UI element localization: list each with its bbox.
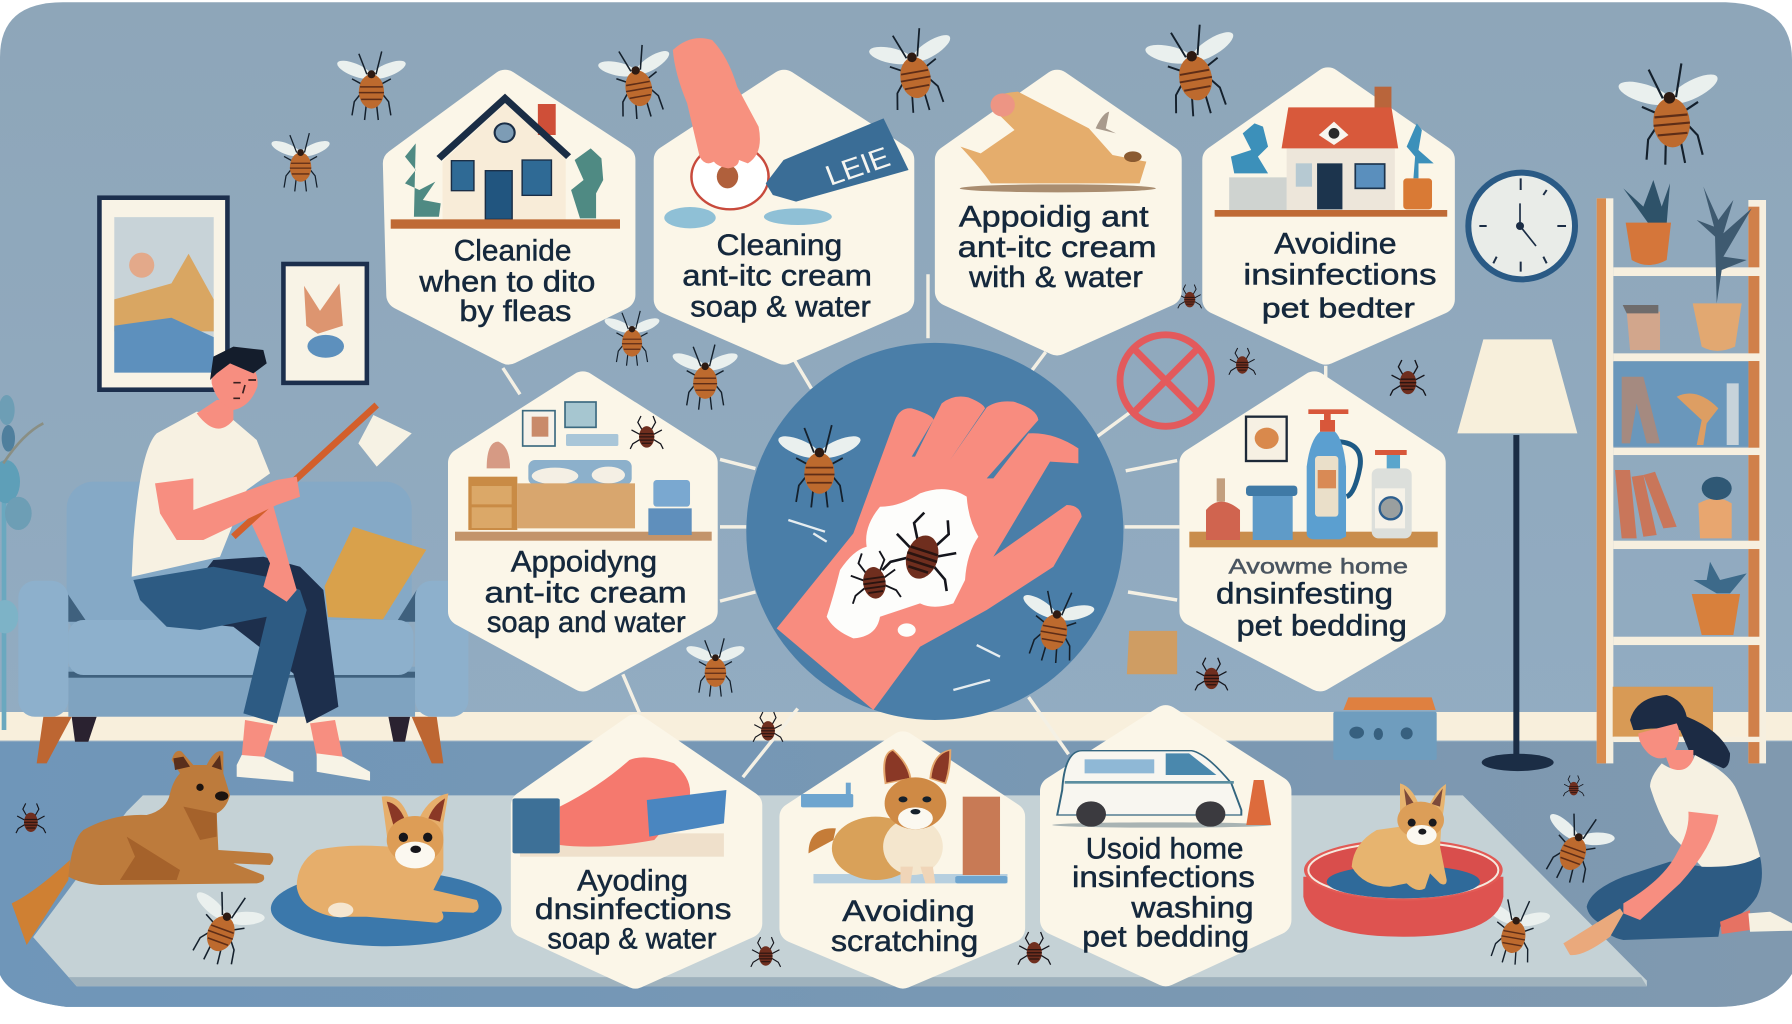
center circle bbox=[746, 343, 1123, 720]
heading text: Cleaning bbox=[717, 229, 842, 262]
dog bbox=[1352, 783, 1447, 890]
icon: hand with cream and ticks bbox=[777, 396, 1082, 710]
hexagon panel: top 4 bbox=[1215, 82, 1447, 350]
shelf unit bbox=[1597, 180, 1766, 763]
picture frame small bbox=[283, 264, 367, 383]
heading text bbox=[535, 864, 731, 956]
man hair bbox=[210, 347, 267, 380]
man ankles bbox=[242, 720, 343, 760]
heading text: ant-itc cream bbox=[958, 231, 1157, 264]
heading text bbox=[958, 200, 1157, 294]
plant left bbox=[0, 395, 43, 730]
heading text: Ayoding bbox=[577, 864, 688, 897]
man raised arm bbox=[155, 477, 300, 540]
woman legs bbox=[1587, 857, 1762, 940]
heading text: with & water bbox=[968, 261, 1143, 294]
man hanging arm bbox=[247, 500, 297, 602]
man shoes bbox=[237, 753, 370, 782]
woman hair bbox=[1630, 695, 1730, 768]
man head bbox=[212, 357, 258, 410]
man face bbox=[233, 380, 256, 398]
icon: scratching dog bbox=[960, 92, 1156, 192]
heading text bbox=[682, 229, 872, 324]
heading text: Appoidyng bbox=[511, 545, 657, 578]
heading text: when to dito bbox=[418, 265, 595, 298]
paper bag bbox=[1127, 631, 1177, 674]
box on lowest shelf bbox=[1613, 687, 1713, 737]
hexagon panel: middle right bbox=[1189, 386, 1438, 677]
tick small bbox=[846, 549, 901, 604]
icon: bedroom furniture bbox=[455, 402, 712, 541]
scratcher head bbox=[358, 415, 412, 467]
hexagon panel: top 2 bbox=[664, 38, 909, 350]
heading text: pet bedding bbox=[1082, 920, 1249, 953]
heading text: ant-itc cream bbox=[682, 260, 872, 293]
woman sock and shoe bbox=[1720, 910, 1750, 934]
heading text: Avoiding bbox=[842, 895, 975, 928]
heading text: ant-itc cream bbox=[485, 576, 687, 609]
blue pet bed left bbox=[271, 871, 502, 946]
man shirt bbox=[132, 412, 270, 577]
icon: house with red roof bbox=[1215, 87, 1447, 217]
heading text: dnsinfections bbox=[535, 893, 731, 926]
heading text bbox=[485, 545, 687, 639]
picture frame large bbox=[99, 198, 227, 390]
heading text: by fleas bbox=[459, 295, 571, 328]
tick large bbox=[882, 506, 968, 591]
heading text: insinfections bbox=[1243, 259, 1437, 292]
heading text: insinfections bbox=[1072, 861, 1255, 894]
device on floor bbox=[1333, 697, 1437, 760]
motion marks bbox=[788, 520, 1000, 690]
hexagon panel: top 3 bbox=[950, 85, 1167, 341]
man with scratcher bbox=[132, 347, 412, 782]
man front leg bbox=[133, 567, 307, 723]
woman arm bbox=[1623, 812, 1718, 920]
heading text bbox=[1072, 832, 1255, 953]
heading text: Appoidig ant bbox=[959, 200, 1149, 233]
brown dog lying bbox=[12, 751, 273, 945]
dog body bbox=[68, 751, 273, 885]
heading text: pet bedding bbox=[1237, 609, 1407, 642]
cushion bbox=[325, 527, 426, 619]
red prohibition sign bbox=[1120, 335, 1211, 426]
hexagon panel: bottom right bbox=[1052, 720, 1277, 971]
heading text bbox=[1216, 554, 1408, 642]
scratcher stick bbox=[233, 405, 377, 537]
corgi on pet bed bbox=[297, 793, 479, 923]
cream dot bbox=[898, 623, 916, 637]
heading text: soap & water bbox=[690, 291, 871, 324]
hexagon panel: middle left bbox=[455, 386, 712, 677]
heading text: dnsinfesting bbox=[1216, 577, 1393, 610]
heading text bbox=[831, 895, 978, 958]
brush bbox=[1563, 908, 1623, 955]
woman neck bbox=[1663, 750, 1693, 777]
heading text: Usoid home bbox=[1086, 832, 1243, 865]
heading text: Avoidine bbox=[1274, 228, 1397, 261]
woman shirt bbox=[1650, 755, 1760, 867]
hand bbox=[777, 396, 1082, 710]
bed bbox=[1303, 877, 1503, 937]
shelf pots and plants bbox=[1615, 180, 1752, 635]
rug bbox=[33, 795, 1647, 986]
heading text: Cleanide bbox=[454, 235, 571, 268]
connector lines bbox=[503, 274, 1326, 777]
red pet bed with dog bbox=[1303, 783, 1503, 937]
icon: finger, swab and cream tube bbox=[664, 38, 909, 228]
dog face details bbox=[173, 755, 222, 770]
sofa bbox=[18, 482, 468, 763]
man neck bbox=[197, 400, 233, 429]
hexagon panel: bottom left bbox=[512, 729, 747, 974]
hexagon panel: bottom center bbox=[794, 746, 1010, 974]
floor lamp bbox=[1457, 339, 1577, 771]
heading text: scratching bbox=[831, 925, 978, 958]
dog tail bbox=[12, 860, 70, 945]
heading text: Avowme home bbox=[1229, 554, 1408, 579]
cream bbox=[827, 489, 978, 638]
icon: house bbox=[391, 98, 620, 229]
icon: corgi bbox=[801, 750, 1007, 883]
heading text bbox=[1243, 228, 1437, 324]
dog fur patch bbox=[120, 807, 217, 880]
wall clock bbox=[1468, 173, 1575, 279]
heading text: pet bedter bbox=[1262, 293, 1415, 324]
icon: finger, swab and cream tube: LEIE bbox=[821, 141, 895, 192]
hexagon panel: top 1 bbox=[391, 85, 621, 350]
icon: van bbox=[1052, 751, 1271, 828]
woman kneeling bbox=[1563, 695, 1792, 955]
icon: cleaning products bbox=[1189, 409, 1438, 547]
heading text: soap and water bbox=[487, 606, 686, 639]
icon: hand with cloth bbox=[512, 757, 726, 857]
man back leg bbox=[167, 557, 338, 723]
woman face bbox=[1638, 723, 1679, 758]
heading text: washing bbox=[1130, 892, 1254, 925]
heading text bbox=[418, 235, 595, 328]
heading text: soap & water bbox=[547, 923, 717, 956]
